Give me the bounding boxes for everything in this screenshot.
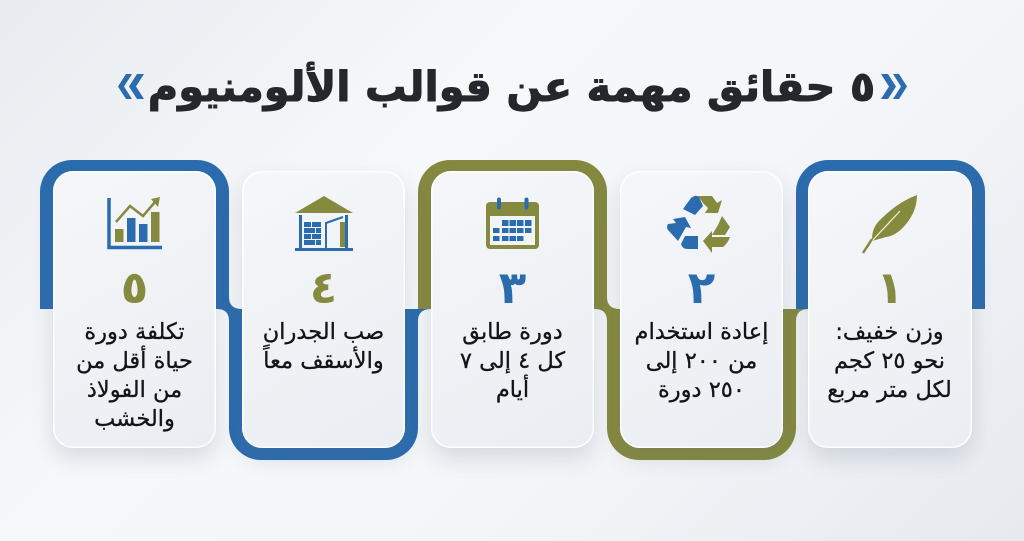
- panel: fact 5: [53, 171, 216, 448]
- text: تكلفة دورة: [84, 318, 185, 344]
- text: وزن خفيف:: [835, 318, 944, 344]
- text: أيام: [496, 376, 529, 402]
- panel: fact 2: [620, 171, 783, 448]
- number 1: ١: [876, 261, 904, 314]
- icon: right title chevrons: [881, 74, 907, 99]
- text: والخشب: [94, 406, 175, 432]
- panel: fact 1: [808, 171, 972, 448]
- text: [76, 318, 193, 432]
- text: نحو ٢٥ كجم: [834, 348, 945, 374]
- number 5: ٥: [121, 261, 148, 314]
- text: من ٢٠٠ إلى: [646, 348, 757, 374]
- icon: feather: [862, 195, 917, 254]
- icon: rising chart: [107, 197, 162, 250]
- text: دورة طابق: [462, 318, 563, 344]
- text: صب الجدران: [263, 318, 384, 344]
- text: لكل متر مربع: [827, 376, 952, 402]
- text: حياة أقل من: [76, 348, 193, 374]
- text: [263, 318, 384, 374]
- text: من الفولاذ: [87, 376, 182, 402]
- text: والأسقف معاً: [263, 348, 384, 374]
- number 3: ٣: [499, 261, 526, 314]
- text: [460, 318, 566, 403]
- text: [827, 318, 952, 403]
- icon: building with wall: [295, 196, 353, 251]
- number 2: ٢: [688, 261, 715, 314]
- panel: fact 3: [431, 171, 594, 448]
- icon: left title chevrons: [118, 74, 144, 99]
- title: ٥ حقائق مهمة عن قوالب الألومنيوم: [148, 62, 875, 111]
- text: كل ٤ إلى ٧: [460, 348, 565, 374]
- panel: fact 4: [242, 171, 405, 448]
- number 4: ٤: [310, 261, 337, 314]
- text: إعادة استخدام: [635, 318, 768, 344]
- icon: calendar: [486, 198, 539, 249]
- text: [635, 318, 768, 403]
- icon: recycle: [667, 196, 730, 253]
- text: ٢٥٠ دورة: [658, 376, 745, 402]
